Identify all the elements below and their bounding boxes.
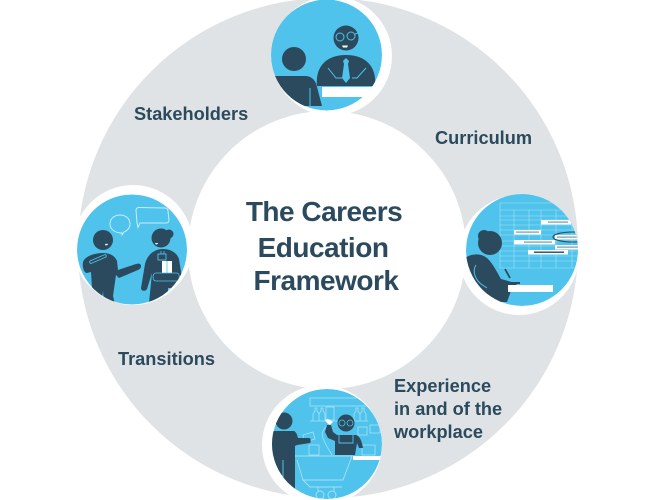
- icon halo: top: [272, 0, 392, 116]
- icon: curriculum timetable: [466, 194, 578, 306]
- label: experience: in and of the: [394, 399, 502, 419]
- customer: [276, 412, 292, 430]
- icon: stakeholders meeting: [262, 0, 382, 110]
- icon halo: bottom: [262, 385, 382, 500]
- person left: [93, 230, 113, 250]
- label: curriculum: Curriculum: [435, 128, 532, 148]
- icon: workplace shop: [270, 389, 383, 499]
- label: stakeholders: Stakeholders: [134, 104, 248, 124]
- timetable grid: [500, 203, 585, 268]
- title: The Careers: [246, 196, 402, 227]
- title: Framework: [254, 265, 399, 296]
- trolley: [295, 456, 352, 491]
- title: Education: [258, 232, 388, 263]
- icon: transitions conversation: [77, 194, 187, 304]
- speech bubbles: [110, 215, 130, 235]
- icon halo: left: [73, 185, 193, 305]
- label: experience: Experience: [394, 376, 491, 396]
- ring: [78, 0, 578, 498]
- icon halo: right: [459, 195, 579, 315]
- timetable entries: [514, 220, 579, 254]
- shop shelves and goods: [303, 398, 380, 455]
- label: experience: workplace: [393, 422, 483, 442]
- label: transitions: Transitions: [118, 349, 215, 369]
- student: [478, 231, 502, 255]
- shop worker: [338, 414, 354, 432]
- person right: [152, 228, 170, 248]
